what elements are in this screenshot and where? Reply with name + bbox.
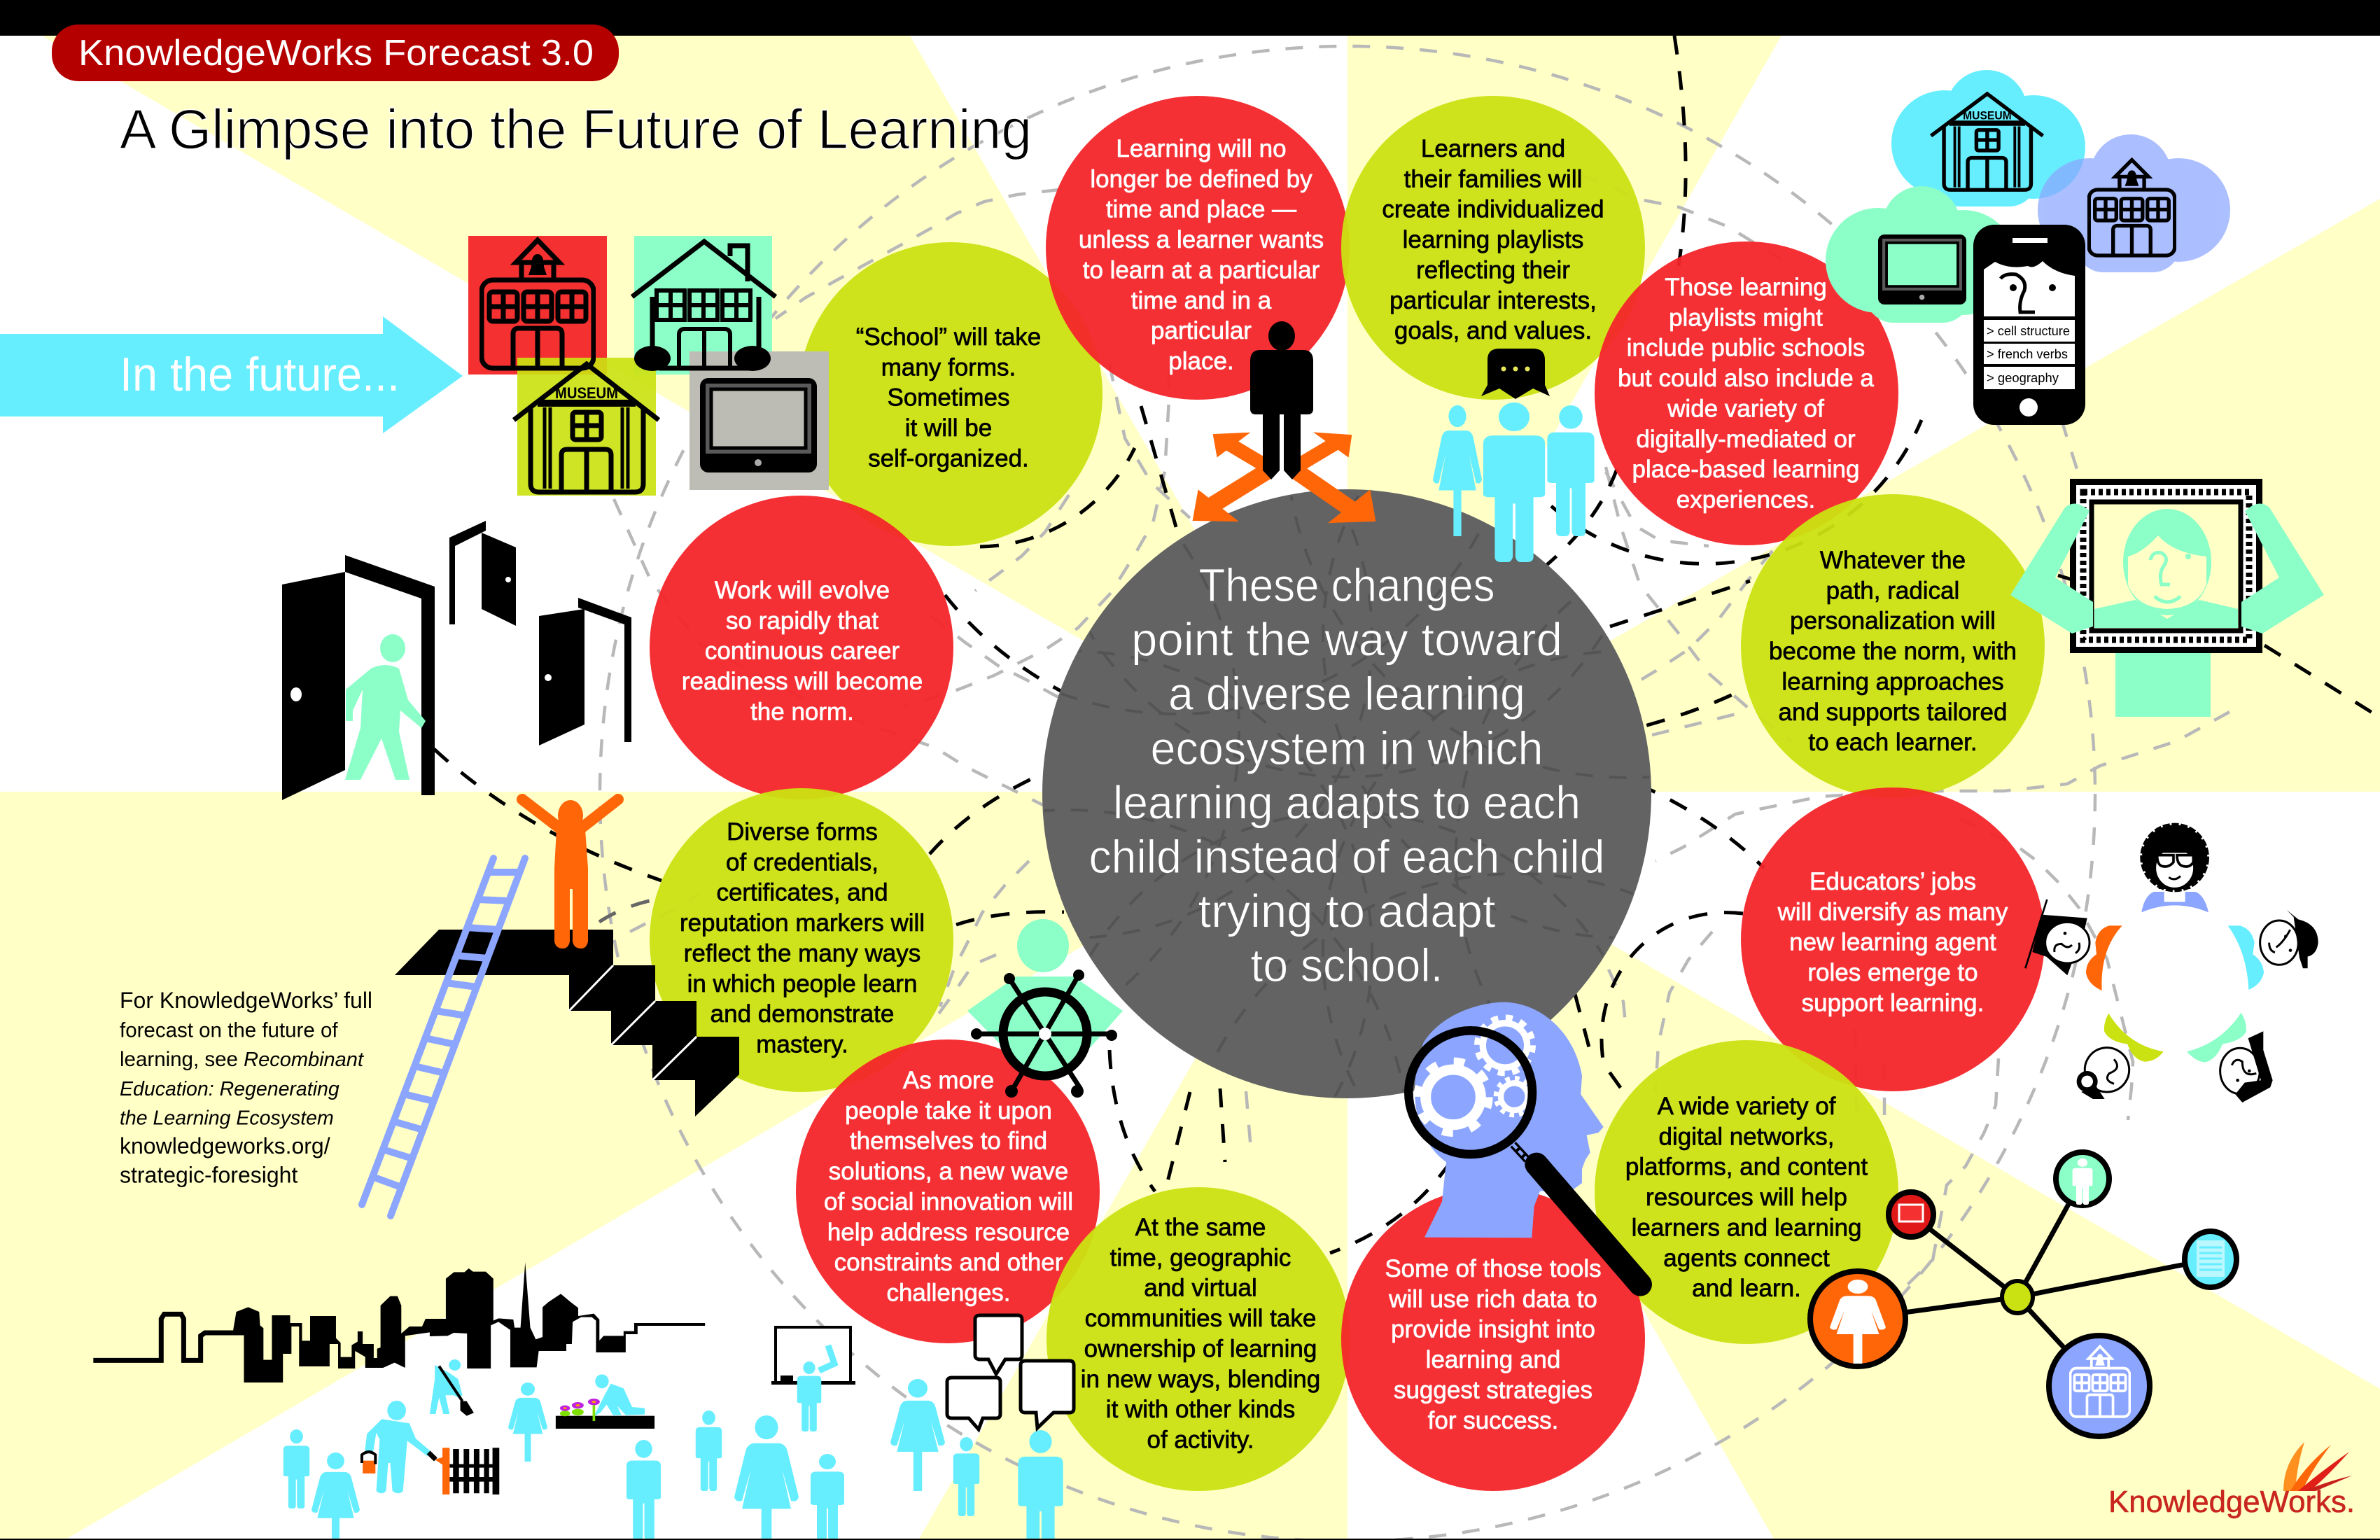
- forecast title pill: KnowledgeWorks Forecast 3.0: [78, 33, 594, 74]
- info text: full forecast reference: forecast on the future of: [120, 1019, 338, 1042]
- icon: clouds with buildings and tablet: [1826, 70, 2230, 323]
- bubble: educators' jobs: will diversify as many: [1777, 898, 2008, 925]
- main title: A Glimpse into the Future of Learning: [120, 98, 1032, 160]
- bubble: those learning playlists: wide variety of: [1667, 395, 1824, 422]
- top black bar: [0, 0, 2380, 36]
- logo: KnowledgeWorks: KnowledgeWorks.: [2108, 1485, 2355, 1519]
- bubble: rich data tools: will use rich data to: [1388, 1285, 1597, 1312]
- bubble: educators' jobs: support learning.: [1802, 989, 1984, 1016]
- bubble: radical personalization: learning approaches: [1782, 668, 2004, 695]
- bubble: digital networks: A wide variety of: [1658, 1093, 1836, 1120]
- bubble: social innovation: challenges.: [886, 1279, 1011, 1306]
- bubble: those learning playlists: playlists might: [1669, 304, 1823, 331]
- info text: full forecast reference: the Learning Ecosystem: [120, 1107, 334, 1129]
- bubble: career readiness: continuous career: [705, 638, 899, 665]
- icon: family with speech bubble: [1433, 349, 1595, 562]
- icon: man with arrows: [1194, 321, 1374, 522]
- bubble: social innovation: of social innovation will: [824, 1188, 1073, 1215]
- bubble: educators' jobs: [1741, 788, 2045, 1091]
- bubble: time and place: unless a learner wants: [1079, 226, 1324, 253]
- bubble: radical personalization: become the norm, with: [1769, 638, 2017, 665]
- bubble: diverse credentials: and demonstrate: [710, 1000, 894, 1028]
- bubble: diverse credentials: mastery.: [756, 1030, 848, 1058]
- bubble: school will take many forms: it will be: [905, 414, 992, 442]
- icons: school forms: [468, 236, 829, 496]
- icon: doors and walking person: [282, 521, 631, 800]
- icon: speech bubbles: [947, 1315, 1074, 1429]
- bubble: school will take many forms: self-organized.: [868, 444, 1029, 472]
- bubble: diverse credentials: reputation markers will: [680, 909, 925, 937]
- bubble: educators' jobs: Educators’ jobs: [1809, 868, 1976, 895]
- bubble: those learning playlists: but could also include a: [1618, 365, 1874, 392]
- icon: phone with playlist: > cell structure: [1987, 324, 2070, 338]
- bubble: learning playlists: reflecting their: [1416, 256, 1570, 284]
- bubble: digital networks: digital networks,: [1659, 1123, 1834, 1150]
- center gray circle: point the way toward: [1131, 614, 1562, 666]
- bubble: learning playlists: [1341, 96, 1645, 400]
- icon: phone with playlist: > french verbs: [1987, 347, 2068, 361]
- bubble: time and place: particular: [1151, 317, 1252, 344]
- scene: teacher at whiteboard: [771, 1327, 855, 1432]
- bubble: communities: it with other kinds: [1106, 1396, 1295, 1423]
- bubble: digital networks: resources will help: [1646, 1184, 1847, 1211]
- info text: full forecast reference: For KnowledgeWorks’ full: [120, 988, 372, 1013]
- bubble: learning playlists: create individualized: [1382, 196, 1604, 223]
- bubble: career readiness: Work will evolve: [715, 577, 890, 604]
- arrow: in the future: [0, 316, 463, 433]
- bubble: social innovation: themselves to find: [850, 1128, 1047, 1155]
- scene: sweeper: [430, 1359, 474, 1416]
- bubble: digital networks: [1595, 1040, 1898, 1344]
- bubble: radical personalization: and supports tailored: [1779, 699, 2007, 726]
- bubble: educators' jobs: roles emerge to: [1807, 959, 1978, 986]
- icon: stairs, ladder and climber: [362, 799, 739, 1216]
- bubble: diverse credentials: reflect the many ways: [684, 939, 920, 967]
- bubble: communities: communities will take: [1085, 1305, 1316, 1332]
- bubble: digital networks: and learn.: [1692, 1275, 1801, 1302]
- center gray circle: [1042, 489, 1651, 1098]
- bubble: career readiness: so rapidly that: [726, 607, 878, 634]
- bubble: communities: ownership of learning: [1084, 1335, 1317, 1362]
- center gray circle: a diverse learning: [1168, 668, 1525, 720]
- bubble: rich data tools: learning and: [1426, 1346, 1560, 1373]
- arrow: in the future: In the future...: [120, 348, 400, 401]
- bubble: digital networks: learners and learning: [1632, 1214, 1861, 1241]
- bubble: social innovation: help address resource: [827, 1219, 1070, 1246]
- bubble: communities: time, geographic: [1110, 1244, 1291, 1271]
- info text: full forecast reference: Education: Regenerating: [120, 1078, 340, 1100]
- bubble: social innovation: solutions, a new wave: [829, 1158, 1068, 1185]
- bubble: diverse credentials: Diverse forms: [727, 818, 878, 846]
- icon: head with magnifier and gears: [1408, 1002, 1640, 1284]
- icon: person holding framed portrait: [2010, 479, 2324, 717]
- bubble: radical personalization: personalization will: [1790, 608, 1996, 635]
- bubble: social innovation: people take it upon: [845, 1097, 1052, 1124]
- bubble: school will take many forms: many forms.: [881, 354, 1016, 381]
- bubble: social innovation: constraints and other: [834, 1249, 1063, 1276]
- bubble: school will take many forms: [799, 242, 1102, 546]
- icon: network of nodes: [1810, 1152, 2236, 1436]
- bubble: rich data tools: Some of those tools: [1385, 1255, 1602, 1282]
- scene: gardener with flowers: [556, 1374, 654, 1429]
- bubble: communities: of activity.: [1147, 1426, 1254, 1453]
- bubble: learning playlists: their families will: [1404, 165, 1582, 192]
- center gray circle: child instead of each child: [1089, 831, 1604, 883]
- bubble: learning playlists: particular interests,: [1390, 287, 1597, 314]
- bubble: those learning playlists: experiences.: [1676, 486, 1815, 513]
- bottom edge line: [0, 1539, 2380, 1540]
- icon: phone with playlist: > geography: [1987, 371, 2059, 385]
- center gray circle: trying to adapt: [1198, 886, 1496, 938]
- bubble: social innovation: As more: [903, 1067, 994, 1094]
- center gray circle: to school.: [1250, 939, 1443, 992]
- bubble: career readiness: [650, 496, 953, 799]
- bubble: those learning playlists: Those learning: [1665, 274, 1827, 301]
- bubble: digital networks: platforms, and content: [1625, 1154, 1868, 1181]
- bubble: career readiness: readiness will become: [682, 668, 923, 695]
- bubble: those learning playlists: digitally-mediated or: [1636, 426, 1856, 453]
- dashed orbit lines: [434, 36, 2380, 1540]
- icon: person steering ship wheel: [967, 919, 1123, 1098]
- bubble: time and place: to learn at a particular: [1083, 256, 1320, 284]
- icon: round table of educators: [2025, 825, 2318, 1102]
- bubble: radical personalization: [1741, 494, 2045, 798]
- bubble: communities: [1046, 1187, 1350, 1491]
- bubble: school will take many forms: “School” will take: [856, 323, 1041, 351]
- bubble: time and place: time and place —: [1106, 196, 1296, 223]
- bubble: educators' jobs: new learning agent: [1789, 929, 1996, 956]
- bubble: those learning playlists: place-based learning: [1632, 456, 1859, 483]
- bubble: rich data tools: for success.: [1428, 1407, 1558, 1434]
- info text: full forecast reference: knowledgeworks.org/: [120, 1133, 330, 1158]
- center gray circle: These changes: [1198, 559, 1495, 612]
- icon: phone with playlist: [1973, 225, 2085, 425]
- bubble: diverse credentials: of credentials,: [726, 848, 878, 876]
- bubble: time and place: Learning will no: [1116, 135, 1287, 162]
- community people: [284, 1379, 1063, 1540]
- bubble: diverse credentials: in which people learn: [687, 970, 917, 997]
- info text: full forecast reference: learning, see Recombinant: [120, 1048, 363, 1071]
- info text: full forecast reference: strategic-foresight: [120, 1163, 298, 1188]
- center gray circle: ecosystem in which: [1151, 722, 1543, 775]
- bubble: rich data tools: suggest strategies: [1394, 1376, 1592, 1404]
- bubble: communities: and virtual: [1144, 1275, 1257, 1302]
- bubble: learning playlists: learning playlists: [1403, 226, 1583, 253]
- logo: KnowledgeWorks: [2108, 1442, 2355, 1519]
- bubble: time and place: longer be defined by: [1090, 165, 1312, 192]
- bubble: rich data tools: provide insight into: [1391, 1316, 1595, 1343]
- skyline: [93, 1262, 705, 1382]
- bubble: radical personalization: path, radical: [1826, 577, 1959, 604]
- bubble: social innovation: [796, 1040, 1100, 1343]
- bubble: radical personalization: to each learner.: [1808, 729, 1977, 756]
- bubble: career readiness: the norm.: [750, 698, 854, 725]
- bubble: learning playlists: goals, and values.: [1394, 317, 1592, 344]
- bubble: rich data tools: [1341, 1187, 1645, 1491]
- bubble: diverse credentials: certificates, and: [716, 879, 888, 906]
- scene: painter with fence: [362, 1401, 499, 1494]
- forecast title pill: [52, 24, 619, 81]
- bubble: those learning playlists: include public schools: [1627, 335, 1865, 362]
- bubble: school will take many forms: Sometimes: [887, 384, 1010, 412]
- bubble: communities: in new ways, blending: [1081, 1366, 1320, 1393]
- bubble: time and place: [1046, 96, 1350, 400]
- bubble: radical personalization: Whatever the: [1820, 547, 1966, 574]
- bubble: communities: At the same: [1135, 1214, 1266, 1241]
- bubble: learning playlists: Learners and: [1421, 135, 1565, 162]
- bubble: those learning playlists: [1595, 241, 1898, 545]
- bubble: time and place: time and in a: [1131, 287, 1272, 314]
- bubble: diverse credentials: [650, 788, 953, 1092]
- bubble: digital networks: agents connect: [1663, 1245, 1830, 1272]
- center gray circle: learning adapts to each: [1113, 776, 1581, 829]
- bubble: time and place: place.: [1168, 347, 1234, 374]
